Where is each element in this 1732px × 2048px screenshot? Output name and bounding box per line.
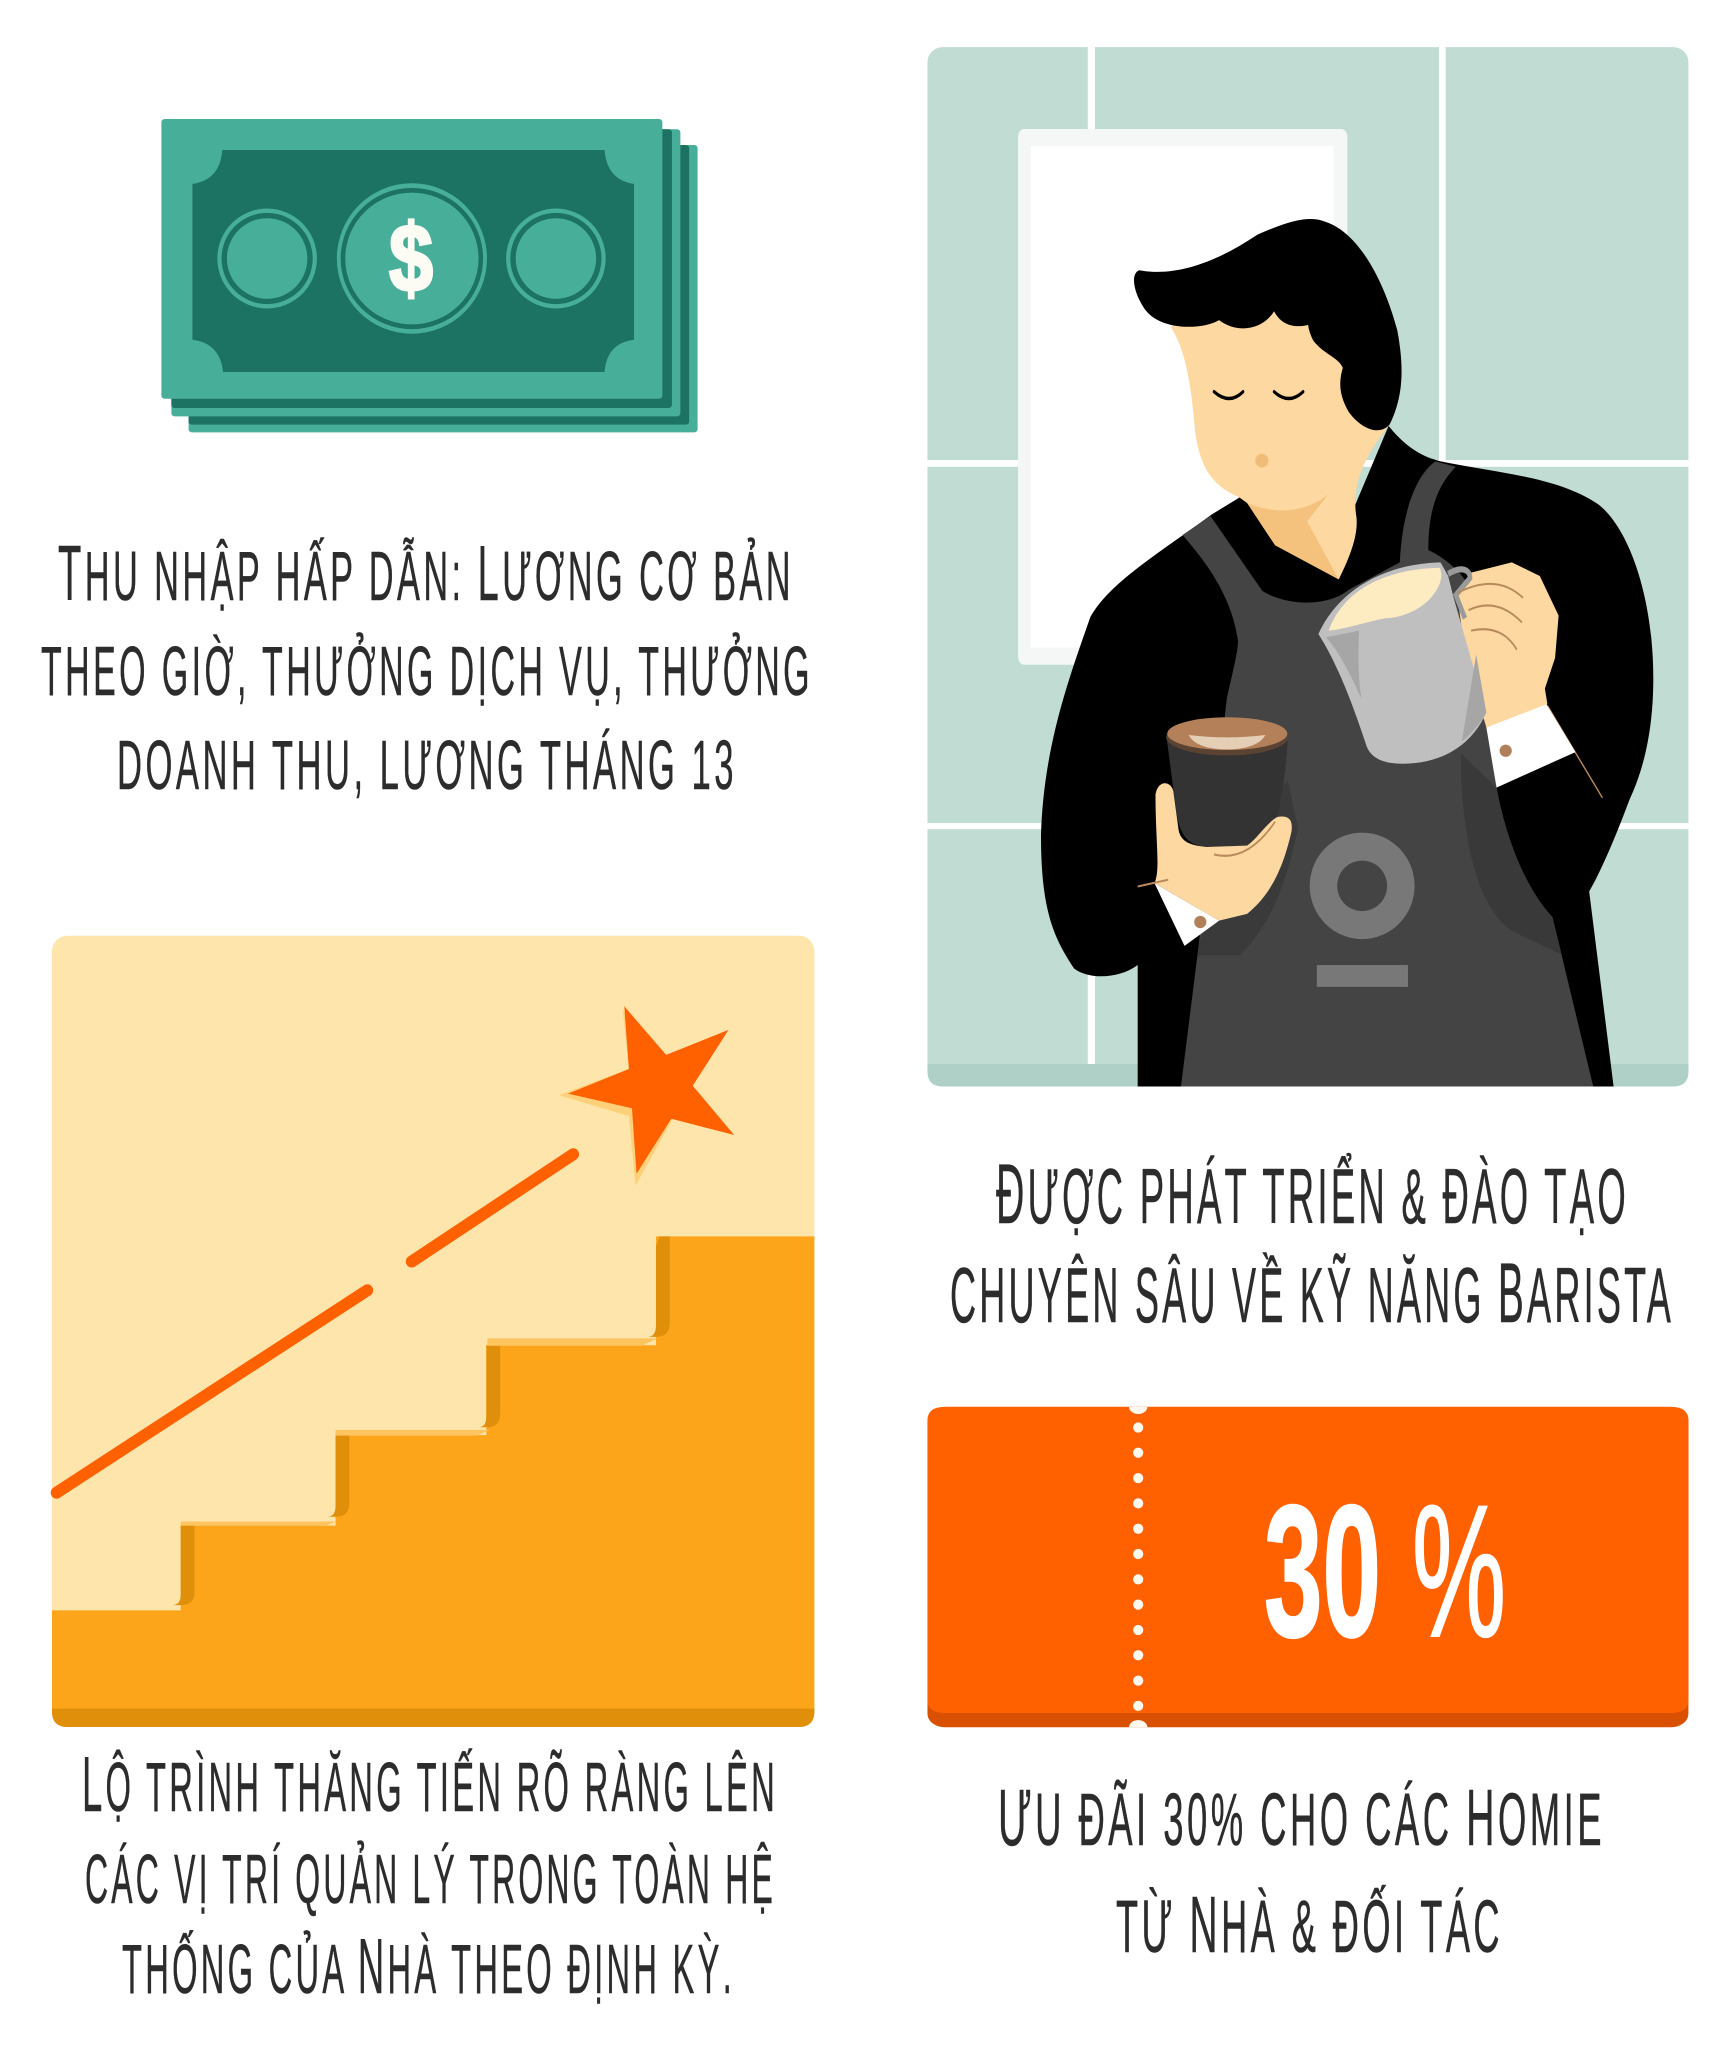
left hand — [1138, 783, 1292, 921]
apron — [1181, 461, 1593, 1087]
text: THEO GIỜ, THƯỞNG DỊCH VỤ, THƯỞNG — [41, 631, 813, 710]
stairs — [52, 1236, 814, 1727]
barista body — [1041, 426, 1653, 1087]
icon: stack of money: $ — [389, 205, 433, 312]
text: training — [950, 1147, 1674, 1340]
window — [1018, 129, 1347, 665]
text: income — [41, 529, 813, 804]
hair — [1134, 219, 1402, 430]
text: income: DOANH THU, LƯƠNG THÁNG 13 — [117, 726, 737, 804]
apron logo — [1310, 833, 1415, 987]
coffee cup — [1166, 717, 1288, 847]
text: LỘ TRÌNH THĂNG TIẾN RÕ RÀNG LÊN — [82, 1740, 778, 1828]
discount value: % — [1412, 1466, 1506, 1676]
text: career path: THỐNG CỦA NHÀ THEO ĐỊNH KỲ. — [122, 1922, 735, 2010]
panel: coupon — [927, 1407, 1688, 1727]
floor band — [927, 1064, 1688, 1087]
right cuff — [1486, 704, 1575, 788]
face and neck — [1171, 303, 1389, 579]
icon: stack of money — [161, 119, 698, 432]
text: income: THU NHẬP HẤP DẪN: LƯƠNG CƠ BẢN — [58, 529, 794, 617]
right hand — [1457, 562, 1602, 798]
arrow line — [57, 1154, 573, 1493]
text: CÁC VỊ TRÍ QUẢN LÝ TRONG TOÀN HỆ — [85, 1840, 776, 1918]
perforation dots — [1129, 1407, 1147, 1727]
text: career path — [82, 1740, 778, 2010]
icon: star — [559, 1006, 734, 1186]
text: discount — [998, 1773, 1605, 1969]
milk jug — [1318, 562, 1523, 764]
panel: barista illustration — [927, 47, 1688, 1087]
left cuff — [1154, 883, 1219, 946]
panel: career stairs — [52, 936, 814, 1727]
discount value: 30 — [1264, 1466, 1381, 1676]
